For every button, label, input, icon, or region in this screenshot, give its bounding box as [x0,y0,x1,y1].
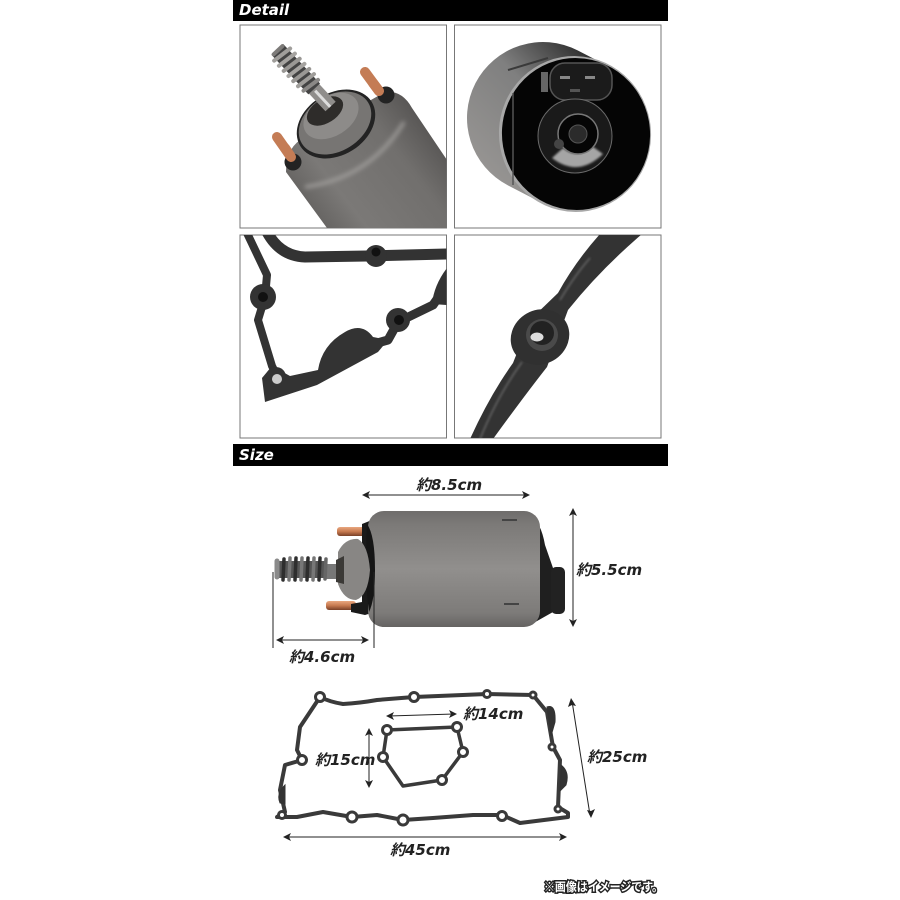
dimension: 45cm [283,833,567,859]
boss [338,539,370,600]
copper pins [277,72,379,157]
body highlight [305,122,404,187]
inner bolt holes [378,722,468,784]
header: Detail: Detail [239,1,290,19]
shaft opening [306,96,344,126]
dimension: 15cm [315,728,375,788]
actuator body [286,92,447,228]
black band over body edge [366,524,375,612]
dimension: 14cm [386,705,523,723]
bolt holes [250,245,410,387]
dimension: 15cm: 約15cm [315,751,375,769]
black end face [502,58,650,210]
disc [538,99,612,173]
outer bolt holes [278,690,561,825]
black gasket ring with ears [284,86,394,170]
lower pin [326,601,356,610]
inner gasket [383,727,463,786]
metal rim [499,56,652,212]
gasket strip [470,234,642,439]
connector socket [541,63,612,100]
worm screw [276,561,326,578]
dimension: 8.5cm [362,476,530,499]
dimension: 5.5cm [569,508,642,627]
outer gasket [277,694,568,823]
black rear cap [530,515,553,625]
photo: valve cover gasket [277,690,568,825]
photo: actuator side view [276,511,565,627]
dimension: 8.5cm: 約8.5cm [416,476,482,494]
dimension: 5.5cm: 約5.5cm [576,561,642,579]
worm screw [270,43,338,113]
gasket strips [247,232,447,378]
side domes [279,707,567,804]
pin bases [285,83,379,157]
body slots [502,519,517,521]
boss [298,92,372,154]
panel: actuator shaft close-up [240,25,447,228]
boss [510,309,570,363]
flange gasket [351,520,376,615]
hole [526,319,558,351]
note: image disclaimer: ※画像はイメージです。 [544,878,663,895]
panel: gasket bolt hole close-up [454,234,661,439]
cylinder side [543,118,574,134]
cylinder body [368,511,540,627]
grey face rib [512,93,514,185]
shaft [326,564,342,579]
header: Size [233,444,668,466]
header: Detail [233,0,668,21]
panel: gasket corner [240,232,447,438]
lens [558,114,598,154]
connector [551,567,565,614]
dimension: 25cm [568,698,647,818]
dimension: 45cm: 約45cm [390,841,450,859]
header: Size: Size [239,446,274,464]
lower tab and dome [262,328,388,402]
side dome [433,268,446,305]
dimension: 4.6cm: 約4.6cm [289,648,355,666]
dimension: 14cm: 約14cm [463,705,523,723]
upper pin [337,527,365,536]
panel: actuator connector end [454,25,663,228]
dimension: 4.6cm [273,572,374,666]
dimension: 25cm: 約25cm [587,748,647,766]
